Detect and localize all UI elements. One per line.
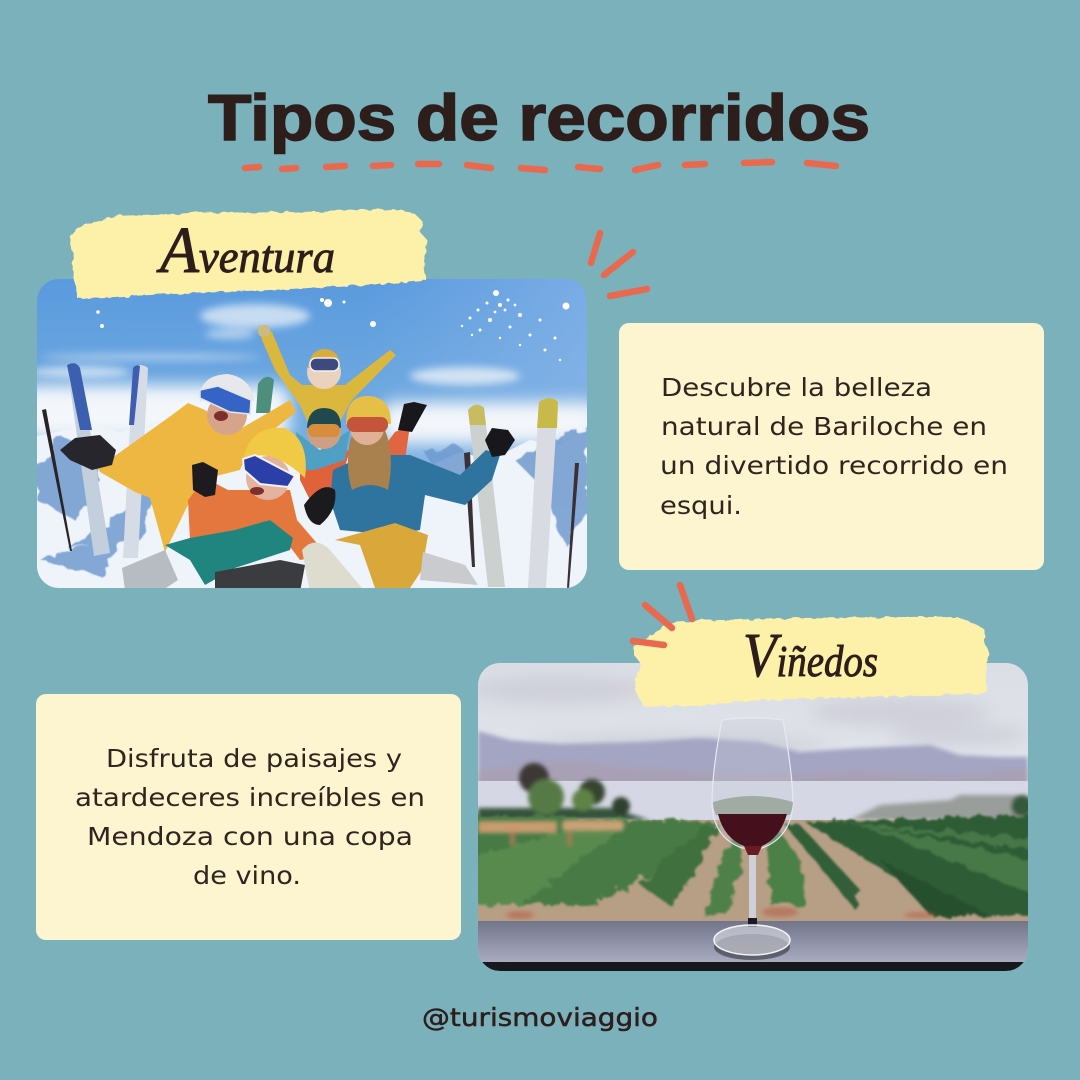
top child	[258, 325, 396, 422]
pergolas	[478, 820, 624, 846]
description text	[660, 373, 1008, 520]
panel: Aventura description	[619, 323, 1044, 570]
description text: de vino.	[193, 861, 301, 890]
title: Tipos de recorridos	[208, 81, 870, 154]
description text: atardeceres increíbles en	[75, 783, 425, 812]
dashed title underline	[245, 162, 836, 170]
description text	[75, 744, 425, 890]
boots	[122, 542, 478, 592]
description text: natural de Bariloche en	[661, 412, 987, 441]
description text: Mendoza con una copa	[87, 822, 413, 851]
description text: Disfruta de paisajes y	[106, 744, 402, 773]
vineyard	[478, 820, 1028, 922]
child in front	[165, 428, 335, 585]
photo: family on ski slope	[20, 279, 600, 592]
accent strokes top	[591, 233, 647, 296]
description text: Descubre la belleza	[661, 373, 932, 402]
label: Aventura: Aventura	[156, 214, 335, 287]
banner: Aventura	[70, 209, 427, 299]
woman in blue jacket	[330, 396, 515, 588]
distant trees and village	[478, 763, 1033, 820]
footer handle: @turismoviaggio	[422, 1003, 658, 1032]
description text: un divertido recorrido en	[660, 451, 1008, 480]
description text: esqui.	[660, 491, 742, 520]
adult man in yellow jacket	[60, 374, 296, 552]
skis and poles	[42, 363, 579, 588]
accent strokes bottom	[633, 585, 692, 645]
banner: Viñedos	[634, 617, 989, 707]
photo: wine glass over vineyard	[470, 663, 1035, 972]
panel: Viñedos description	[36, 694, 461, 940]
wine glass	[712, 718, 793, 960]
ledge	[478, 921, 1028, 962]
mountains	[478, 731, 1028, 785]
label: Viñedos: Viñedos	[743, 622, 878, 690]
middle adult	[296, 408, 350, 498]
snow specks	[96, 290, 569, 361]
lake	[478, 781, 1028, 820]
